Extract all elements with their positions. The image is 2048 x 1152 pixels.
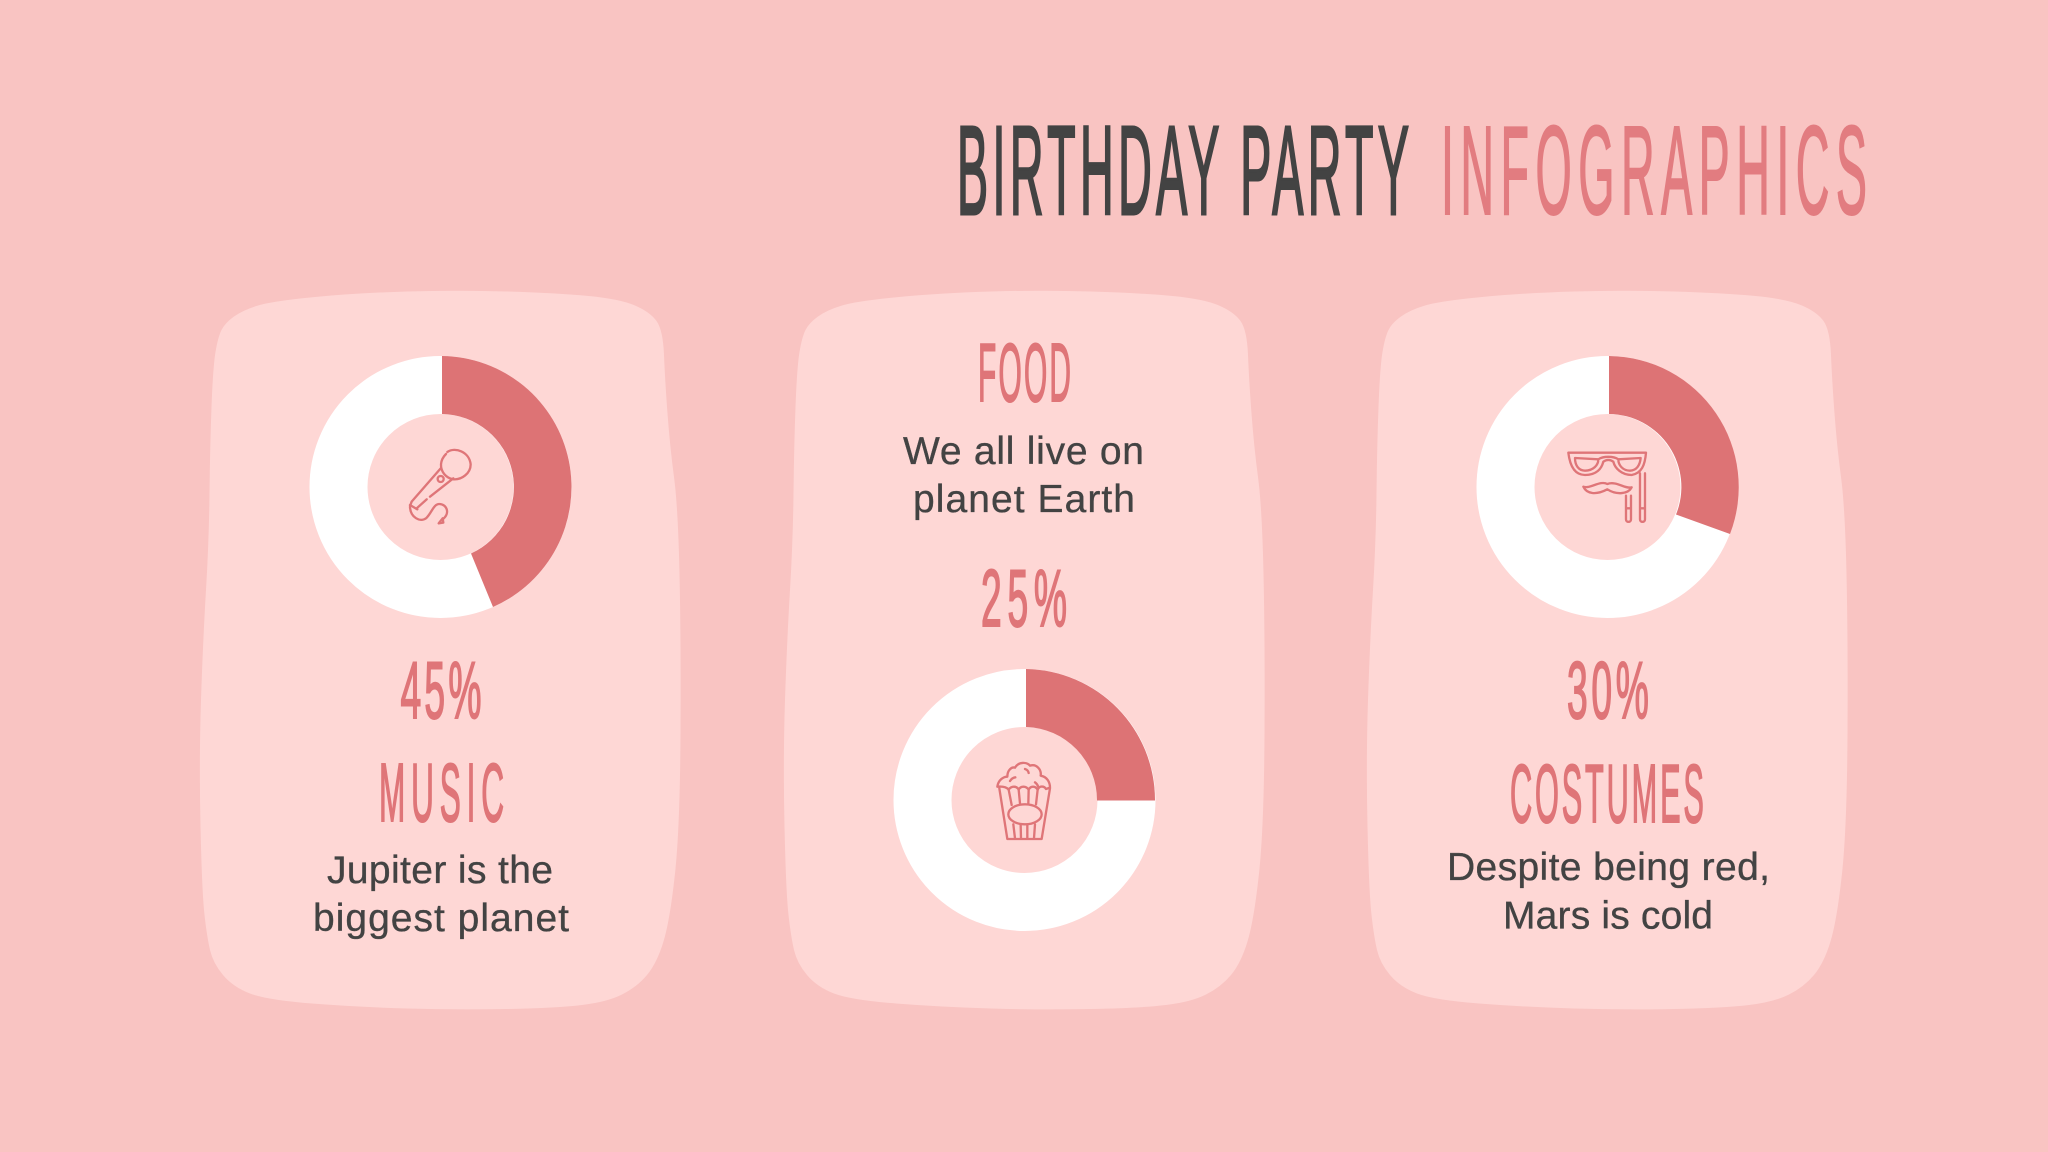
heading: music: MUSIC — [379, 747, 504, 840]
percentage: 45%: 45% — [400, 646, 481, 736]
title — [957, 101, 1867, 242]
heading: costumes: COSTUMES — [1510, 748, 1704, 841]
icon: popcorn — [997, 763, 1050, 839]
icon: microphone — [410, 450, 471, 523]
description: music: biggest planet — [313, 897, 569, 940]
heading: food: FOOD — [978, 328, 1071, 420]
panel: music — [200, 291, 681, 1009]
description: food: planet Earth — [913, 478, 1135, 521]
donut chart: 30% — [1506, 356, 1739, 589]
percentage: 25%: 25% — [981, 554, 1067, 644]
description: costumes: Mars is cold — [1503, 894, 1713, 938]
percentage: 30%: 30% — [1567, 646, 1649, 736]
panel: costumes — [1367, 291, 1848, 1009]
description: food — [903, 430, 1144, 521]
donut chart: 45% — [338, 356, 571, 607]
card background — [784, 291, 1265, 1009]
description: costumes — [1447, 846, 1770, 938]
donut chart: 25% — [922, 669, 1155, 902]
description: music — [313, 849, 569, 940]
card background — [1367, 291, 1848, 1009]
description: costumes: Despite being red, — [1447, 846, 1770, 889]
panel: food — [784, 291, 1265, 1009]
description: music: Jupiter is the — [327, 849, 553, 892]
card background — [200, 291, 681, 1009]
title: INFOGRAPHICS — [1441, 101, 1867, 242]
icon: glasses and moustache on sticks — [1568, 453, 1646, 522]
title: BIRTHDAY PARTY — [957, 101, 1409, 242]
description: food: We all live on — [903, 430, 1144, 473]
